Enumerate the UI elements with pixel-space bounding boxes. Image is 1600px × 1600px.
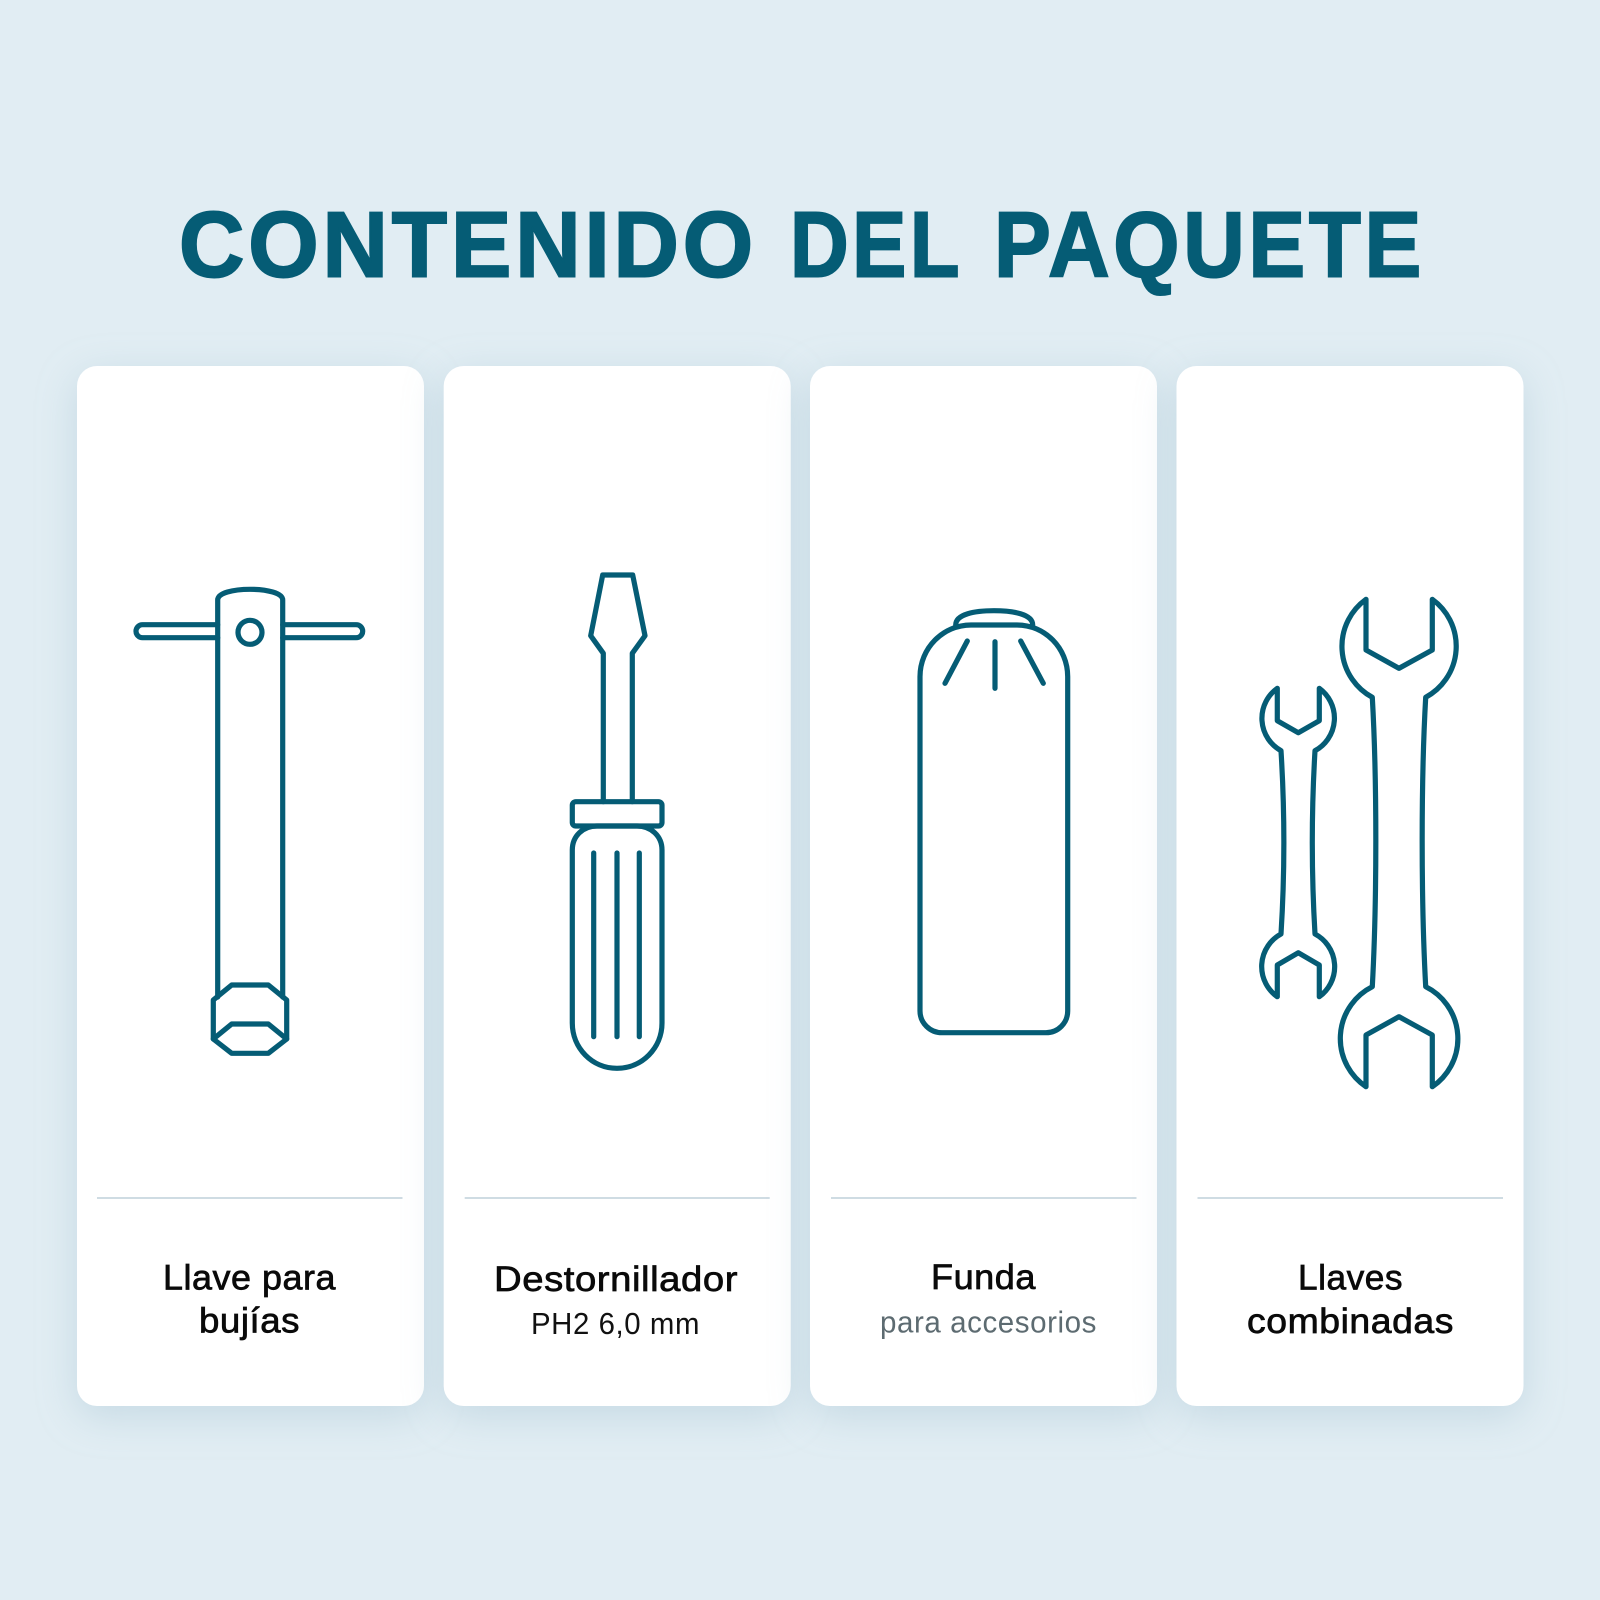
title: DEL <box>790 192 963 296</box>
title <box>179 192 1425 296</box>
panel: destornillador <box>444 366 791 1406</box>
icon: pouch <box>920 611 1068 1033</box>
label: destornillador: PH2 6,0 mm <box>531 1306 700 1341</box>
icon: combination wrenches <box>1262 599 1458 1087</box>
label: funda: para accesorios <box>880 1304 1097 1340</box>
panel: llave para bujías <box>77 366 424 1406</box>
label: llave para bujías: bujías <box>199 1302 300 1340</box>
panel: funda <box>810 366 1157 1406</box>
icon: small wrench <box>1262 688 1335 997</box>
label: llave para bujías <box>163 1258 336 1340</box>
label: destornillador <box>494 1260 738 1341</box>
icon: large wrench <box>1340 599 1458 1087</box>
label: llaves combinadas: Llaves <box>1298 1258 1403 1298</box>
icon: screwdriver <box>572 575 662 1068</box>
title: PAQUETE <box>994 192 1425 296</box>
icon: spark plug wrench <box>136 589 363 1053</box>
title: CONTENIDO <box>179 192 757 296</box>
label: llave para bujías: Llave para <box>163 1258 336 1298</box>
label: llaves combinadas: combinadas <box>1247 1302 1454 1341</box>
panel: llaves combinadas <box>1176 366 1524 1406</box>
label: funda <box>880 1258 1097 1340</box>
label: destornillador: Destornillador <box>494 1260 738 1299</box>
label: funda: Funda <box>931 1258 1036 1297</box>
label: llaves combinadas <box>1247 1258 1454 1341</box>
